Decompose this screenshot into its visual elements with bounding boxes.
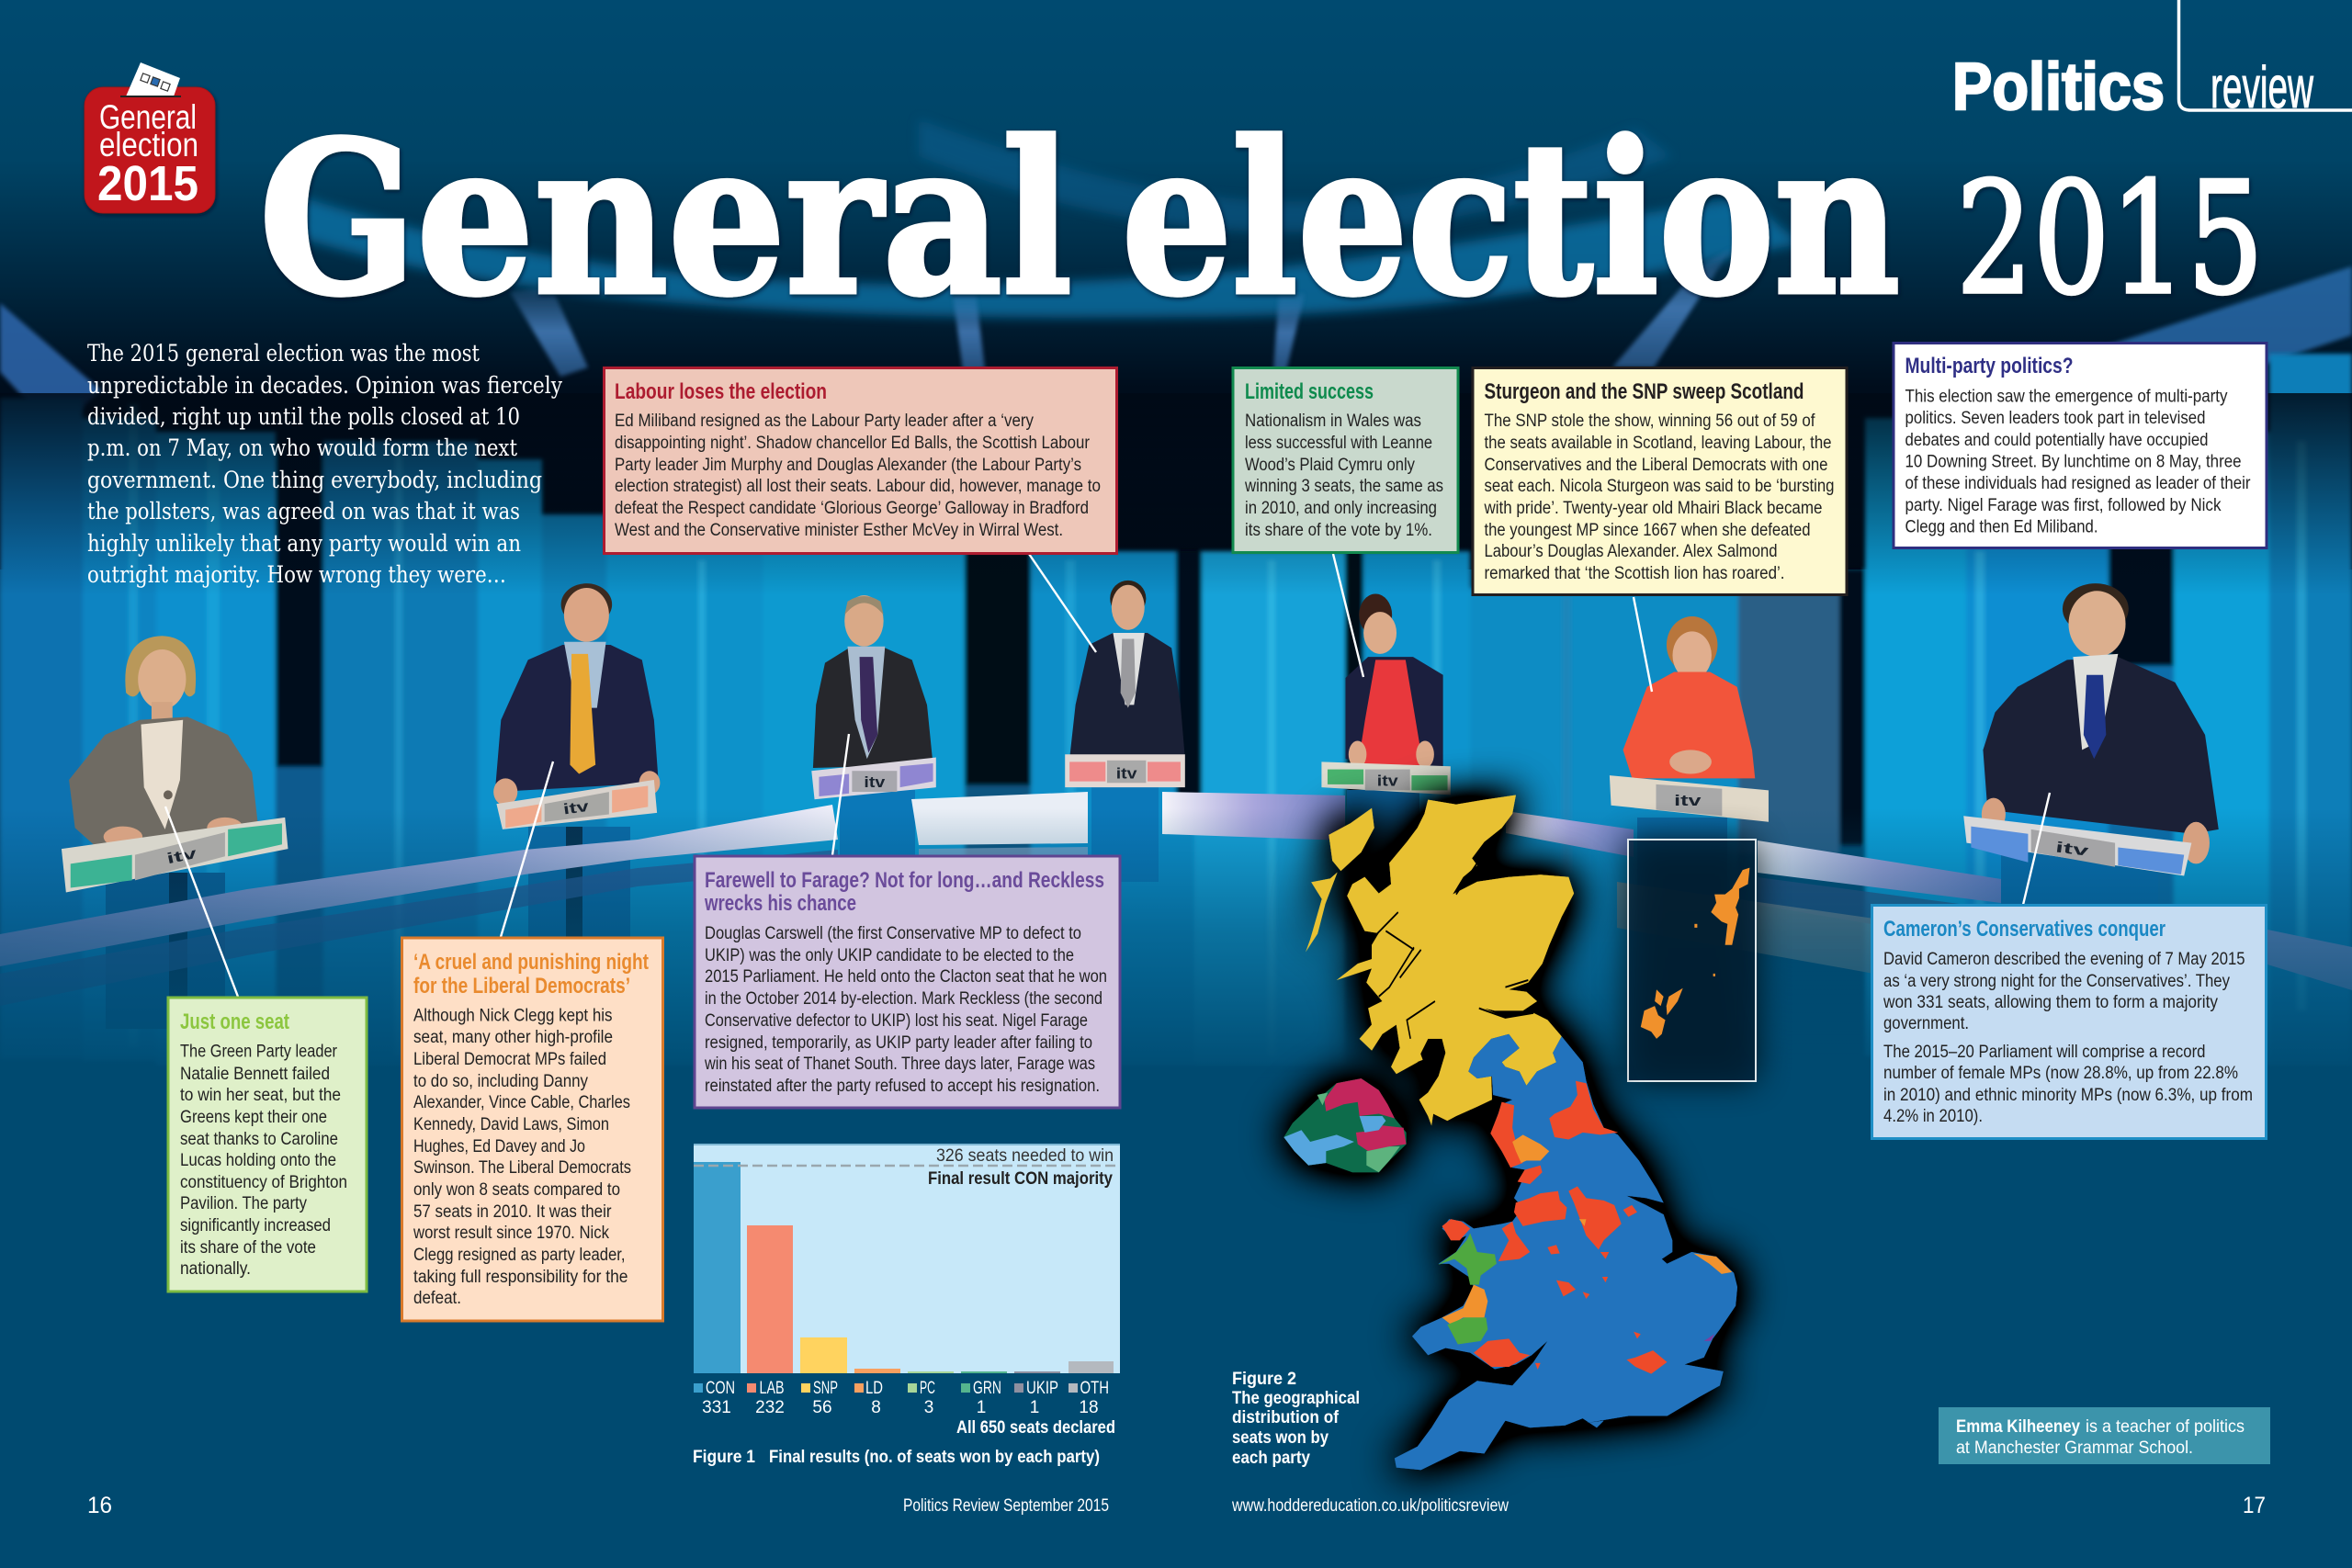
body text: won 331 seats, allowing them to form a majority: [1883, 993, 2218, 1012]
background: curved stage bands: [0, 792, 2352, 1006]
legend: UKIP: [1026, 1379, 1058, 1398]
background: stage pillars: [0, 354, 2352, 1066]
heading: Limited success: [1245, 379, 1374, 404]
intro paragraph: unpredictable in decades. Opinion was fiercely: [87, 372, 563, 399]
body text: only won 8 seats compared to: [413, 1180, 620, 1200]
main title: [259, 96, 2264, 342]
caption: Figure 2: Figure 2: [1232, 1370, 1296, 1389]
legend: PC: [920, 1379, 935, 1398]
heading: for the Liberal Democrats’: [413, 974, 630, 998]
body text: Although Nick Clegg kept his: [413, 1007, 612, 1025]
seat counts: [702, 1398, 1099, 1417]
person: Nicola Sturgeon: [1610, 616, 1769, 822]
heading: Cameron’s Conservatives conquer: [1883, 917, 2165, 942]
person: Ed Miliband: itv: [1116, 765, 1137, 782]
body text: taking full responsibility for the: [413, 1268, 628, 1287]
body text: [413, 1007, 631, 1308]
body text: The 2015–20 Parliament will comprise a record: [1883, 1043, 2205, 1062]
body text: The Green Party leader: [180, 1042, 338, 1062]
seat counts: 8: [871, 1398, 881, 1417]
body text: in 2010) and ethnic minority MPs (now 6.3%, up from: [1883, 1086, 2253, 1105]
body text: remarked that ‘the Scottish lion has roared’.: [1485, 564, 1784, 583]
masthead: Politics review: Politics: [1952, 51, 2165, 124]
intro paragraph: the pollsters, was agreed on was that it was: [87, 498, 520, 525]
caption: Figure 1: Figure 1: [693, 1448, 755, 1467]
intro paragraph: government. One thing everybody, including: [87, 467, 542, 493]
body text: Conservative defector to UKIP) lost his seat. Nigel Farage: [705, 1011, 1088, 1031]
panel: Cameron's Conservatives conquer: [1872, 906, 2266, 1139]
panel: Sturgeon and the SNP sweep Scotland: [1473, 367, 1847, 595]
heading: wrecks his chance: [704, 891, 856, 916]
body text: win his seat of Thanet South. Three days later, Farage was: [704, 1055, 1095, 1074]
caption: Figure 2: seats won by: [1232, 1428, 1329, 1448]
person: Nick Clegg: itv: [562, 798, 590, 818]
photo: party leaders at lecterns: [62, 581, 2219, 892]
masthead: Politics review: [1952, 0, 2352, 124]
main title: 2015: [1956, 149, 2264, 329]
body text: This election saw the emergence of multi-party: [1905, 388, 2228, 406]
body text: [1244, 412, 1443, 540]
body text: as ‘a very strong night for the Conservatives’. They: [1883, 972, 2230, 991]
intro paragraph: The 2015 general election was the most: [87, 340, 480, 367]
legend: SNP: [813, 1379, 838, 1398]
body text: [1883, 950, 2253, 1126]
body text: party. Nigel Farage was first, followed by Nick: [1905, 496, 2222, 515]
body text: Party leader Jim Murphy and Douglas Alexander (the Labour Party’s: [615, 456, 1081, 475]
body text: 4.2% in 2010).: [1883, 1107, 1983, 1126]
person: David Cameron: [1963, 583, 2219, 875]
main title: General: [259, 96, 1072, 342]
panel: Farewell to Farage: [695, 856, 1120, 1108]
body text: to win her seat, but the: [180, 1086, 341, 1105]
body text: Pavilion. The party: [180, 1194, 307, 1213]
body text: significantly increased: [180, 1216, 331, 1235]
body text: Wood’s Plaid Cymru only: [1245, 456, 1415, 475]
seat counts: 3: [924, 1398, 933, 1417]
body text: defeat.: [413, 1289, 461, 1308]
body text: Labour’s Douglas Alexander. Alex Salmond: [1485, 542, 1777, 561]
body text: Clegg resigned as party leader,: [413, 1246, 625, 1265]
body text: constituency of Brighton: [180, 1173, 347, 1192]
general election badge: election: [99, 126, 198, 164]
panel: A cruel and punishing night: [402, 938, 663, 1321]
result label: Final result CON majority: [928, 1169, 1113, 1189]
body text: Liberal Democrat MPs failed: [413, 1050, 606, 1069]
body text: [1484, 412, 1834, 583]
main title: election: [1122, 96, 1900, 342]
body text: 57 seats in 2010. It was their: [413, 1202, 612, 1222]
body text: seat each. Nicola Sturgeon was said to be ‘bursting: [1485, 477, 1834, 496]
legend: LAB: [759, 1379, 785, 1398]
seat counts: 18: [1079, 1398, 1099, 1417]
body text: reinstated after the party refused to accept his resignation.: [705, 1077, 1100, 1096]
author credit box: [1939, 1407, 2270, 1464]
body text: worst result since 1970. Nick: [413, 1224, 609, 1243]
body text: number of female MPs (now 28.8%, up from 22.8%: [1883, 1064, 2238, 1083]
body text: [615, 412, 1101, 540]
map regions: Plaid Cymru: [1439, 1234, 1497, 1344]
caption: Figure 1: Final results (no. of seats won by each party): [769, 1448, 1100, 1467]
legend: [694, 1379, 1109, 1398]
chart: final results bar chart: [694, 1144, 1120, 1438]
heading: Sturgeon and the SNP sweep Scotland: [1485, 379, 1804, 404]
leader lines from panels to politicians: [165, 554, 2050, 997]
body text: in 2010, and only increasing: [1245, 499, 1437, 518]
body text: Alexander, Vince Cable, Charles: [413, 1093, 630, 1112]
body text: in the October 2014 by-election. Mark Reckless (the second: [705, 989, 1102, 1009]
body text: nationally.: [180, 1259, 251, 1279]
legend: CON: [706, 1379, 735, 1398]
body text: Natalie Bennett failed: [180, 1065, 330, 1084]
body text: [180, 1042, 347, 1279]
intro paragraph: divided, right up until the polls closed at 10: [87, 403, 520, 430]
map regions: Labour: [1442, 1081, 1667, 1374]
general election badge: [85, 62, 215, 213]
intro paragraph: outright majority. How wrong they were…: [87, 561, 506, 588]
legend: LD: [865, 1379, 883, 1398]
general election badge: General: [99, 98, 197, 136]
map regions: Liberal Democrat: [1442, 1134, 1732, 1325]
legend: GRN: [973, 1379, 1001, 1398]
seat counts: 331: [702, 1398, 731, 1417]
body text: Lucas holding onto the: [180, 1151, 336, 1170]
person: Nick Clegg: [493, 583, 660, 829]
footer: page 16: 16: [87, 1493, 112, 1518]
panel: Just one seat: [168, 998, 367, 1292]
body text: to do so, including Danny: [413, 1072, 588, 1091]
person: Nicola Sturgeon: itv: [1674, 793, 1701, 809]
person: Leanne Wood: itv: [1377, 773, 1398, 790]
author credit box: at Manchester Grammar School.: [1956, 1438, 2193, 1458]
heading: Labour loses the election: [615, 379, 827, 404]
intro paragraph: p.m. on 7 May, on who would form the next: [87, 434, 517, 461]
person: Natalie Bennett: itv: [165, 845, 198, 867]
body text: Kennedy, David Laws, Simon: [413, 1115, 609, 1134]
heading: Just one seat: [180, 1010, 289, 1034]
body text: less successful with Leanne: [1245, 434, 1432, 453]
map inlets: Scottish firths and lochs: [1375, 863, 1533, 1039]
seat counts: 232: [755, 1398, 785, 1417]
body text: of these individuals had resigned as leader of their: [1905, 474, 2251, 493]
intro paragraph: highly unlikely that any party would win an: [87, 530, 521, 557]
person: Nigel Farage: [811, 595, 936, 799]
map region: Scotland SNP: [1306, 795, 1574, 1125]
body text: 10 Downing Street. By lunchtime on 8 May, three: [1905, 452, 2242, 472]
panel: Multi-party politics?: [1894, 344, 2267, 547]
icon: ballot paper: [120, 62, 181, 97]
body text: West and the Conservative minister Esther McVey in Wirral West.: [615, 521, 1063, 540]
intro paragraph: [87, 340, 563, 588]
body text: 2015 Parliament. He held onto the Clacton seat that he won: [705, 967, 1107, 987]
body text: election strategist) all lost their seats. Labour did, however, manage to: [615, 477, 1101, 496]
body text: [704, 924, 1107, 1096]
map: UK constituencies by winning party: [1283, 795, 1737, 1470]
map: Northern Ireland: [1283, 1078, 1407, 1172]
person: Ed Miliband: [1065, 581, 1185, 787]
body text: Greens kept their one: [180, 1108, 327, 1127]
footer: magazine date: Politics Review September 2015: [903, 1496, 1109, 1516]
body text: UKIP) was the only UKIP candidate to be elected to the: [705, 946, 1074, 965]
seats declared note: All 650 seats declared: [956, 1418, 1115, 1438]
body text: winning 3 seats, the same as: [1244, 477, 1443, 496]
majority label: 326 seats needed to win: [936, 1146, 1114, 1166]
author credit box: Emma Kilheeney: [1956, 1417, 2080, 1437]
body text: Swinson. The Liberal Democrats: [413, 1158, 631, 1178]
legend: OTH: [1080, 1379, 1109, 1398]
footer: website: www.hoddereducation.co.uk/politicsreview: [1231, 1496, 1509, 1516]
seat counts: 1: [1030, 1398, 1039, 1417]
body text: disappointing night’. Shadow chancellor Ed Balls, the Scottish Labour: [615, 434, 1091, 453]
body text: debates and could potentially have occupied: [1905, 431, 2209, 450]
body text: with pride’. Twenty-year old Mhairi Black became: [1484, 499, 1823, 518]
person: Nigel Farage: itv: [864, 774, 885, 791]
body text: Douglas Carswell (the first Conservative MP to defect to: [705, 924, 1081, 943]
body text: Conservatives and the Liberal Democrats with one: [1485, 456, 1828, 475]
body text: its share of the vote by 1%.: [1245, 521, 1432, 540]
person: Leanne Wood: [1321, 594, 1451, 795]
panel: Labour loses the election: [605, 367, 1117, 553]
body text: the youngest MP since 1667 when she defeated: [1485, 521, 1810, 540]
caption: Figure 2: distribution of: [1232, 1408, 1340, 1427]
body text: its share of the vote: [180, 1238, 316, 1258]
panel: Limited success: [1233, 367, 1458, 553]
seat counts: 1: [977, 1398, 986, 1417]
body text: defeat the Respect candidate ‘Glorious George’ Galloway in Bradford: [615, 499, 1089, 518]
background: darkening at pillar tops: [0, 393, 2352, 595]
map region: England and Wales Conservative: [1395, 1034, 1737, 1470]
background: lectern pedestals: [106, 781, 2158, 1029]
body text: Hughes, Ed Davey and Jo: [413, 1137, 585, 1156]
body text: Nationalism in Wales was: [1245, 412, 1421, 431]
body text: seat thanks to Caroline: [180, 1130, 338, 1149]
caption: Figure 2: The geographical: [1232, 1389, 1360, 1408]
body text: David Cameron described the evening of 7 May 2015: [1883, 950, 2245, 969]
caption: Figure 2: [1232, 1370, 1360, 1468]
background: fade to page colour: [0, 808, 2352, 1084]
body text: Clegg and then Ed Miliband.: [1905, 518, 2098, 536]
body text: government.: [1883, 1014, 1969, 1033]
background: light beams: [0, 248, 2352, 432]
map inset backing: Orkney and Shetland: [1628, 840, 1756, 1081]
bars: [694, 1162, 1114, 1373]
body text: Ed Miliband resigned as the Labour Party leader after a ‘very: [615, 412, 1034, 431]
body text: [1905, 388, 2251, 536]
person: David Cameron: itv: [2054, 839, 2089, 860]
flat page lower area: [0, 1084, 2352, 1568]
heading: Multi-party politics?: [1905, 354, 2073, 378]
heading: ‘A cruel and punishing night: [413, 950, 649, 975]
body text: seat, many other high-profile: [413, 1028, 613, 1047]
body text: the seats available in Scotland, leaving Labour, the: [1485, 434, 1832, 453]
author credit box: is a teacher of politics: [2086, 1417, 2245, 1437]
general election badge: 2015: [97, 156, 198, 211]
caption: Figure 2: each party: [1232, 1449, 1310, 1468]
seat counts: 56: [812, 1398, 832, 1417]
map region: UKIP Clacton: [1704, 1334, 1714, 1341]
heading: Farewell to Farage? Not for long…and Reckless: [705, 868, 1104, 893]
body text: The SNP stole the show, winning 56 out of 59 of: [1485, 412, 1815, 431]
body text: resigned, temporarily, as UKIP party leader after failing to: [705, 1033, 1092, 1053]
heading: [413, 950, 649, 998]
heading: [704, 868, 1104, 916]
body text: politics. Seven leaders took part in televised: [1905, 409, 2205, 428]
footer: page 17: 17: [2243, 1493, 2266, 1518]
person: Natalie Bennett: [62, 636, 288, 892]
